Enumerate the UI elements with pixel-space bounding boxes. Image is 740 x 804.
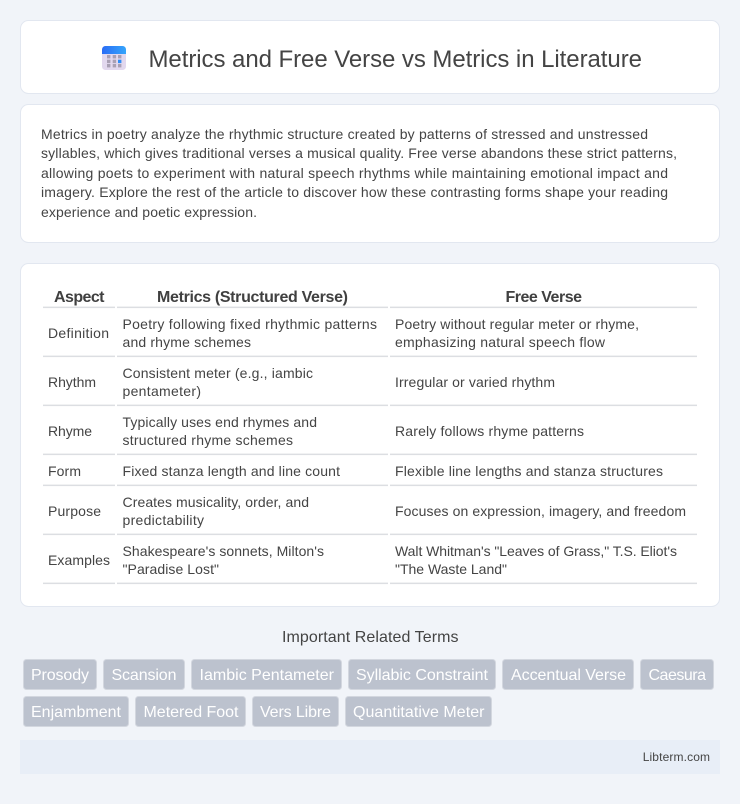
table row: Definition xyxy=(48,316,639,350)
panel: header xyxy=(20,20,720,94)
table row: Definition: and rhyme schemes xyxy=(122,334,251,350)
tag: Caesura: Caesura xyxy=(648,667,706,684)
table row: Rhythm: Consistent meter (e.g., iambic xyxy=(122,365,313,381)
table header row: Aspect xyxy=(54,289,105,306)
table row: Purpose: Focuses on expression, imagery, and freedom xyxy=(395,503,686,519)
table row: Form: Fixed stanza length and line count xyxy=(122,463,340,479)
text block: introduction paragraph: allowing poets to experiment with natural speech rhythms while maintaining emotional impact and xyxy=(41,165,668,181)
table row: Purpose: Purpose xyxy=(48,503,101,519)
table row: Rhyme: Rarely follows rhyme patterns xyxy=(395,423,584,439)
table row: Rhythm: pentameter) xyxy=(122,383,201,399)
table row: Examples: Walt Whitman's "Leaves of Grass," T.S. Eliot's xyxy=(395,543,677,559)
table header row: Free Verse xyxy=(506,289,582,306)
tag: Enjambment: Enjambment xyxy=(31,704,122,721)
footer xyxy=(20,740,720,774)
table row: Definition: Poetry without regular meter or rhyme, xyxy=(395,316,639,332)
table row: Examples: "The Waste Land" xyxy=(395,561,507,577)
table row: Rhythm: Irregular or varied rhythm xyxy=(395,374,555,390)
tag: Enjambment xyxy=(24,696,128,726)
table row: Purpose: Creates musicality, order, and xyxy=(122,494,309,510)
text block: introduction paragraph: syllables, which gives traditional verses a musical quality. Free verse abandons these strict patterns, xyxy=(41,145,677,161)
tag: Iambic Pentameter xyxy=(192,660,342,690)
text block: introduction paragraph: Metrics in poetry analyze the rhythmic structure created by patterns of stressed and unstressed xyxy=(41,126,648,142)
tag: Syllabic Constraint xyxy=(348,660,496,690)
tag: Syllabic Constraint: Syllabic Constraint xyxy=(356,667,489,684)
table row: Definition: Poetry following fixed rhythmic patterns xyxy=(122,316,377,332)
title: Metrics and Free Verse vs Metrics in Literature xyxy=(148,46,642,73)
tag: Accentual Verse: Accentual Verse xyxy=(511,667,626,684)
tag: Scansion xyxy=(104,660,184,690)
tag: Iambic Pentameter: Iambic Pentameter xyxy=(200,667,335,684)
table row: Form: Form xyxy=(48,463,81,479)
table row: Definition: emphasizing natural speech flow xyxy=(395,334,606,350)
table row: Rhyme xyxy=(48,414,584,448)
tag: Quantitative Meter xyxy=(346,696,492,726)
table row: Rhyme: Rhyme xyxy=(48,423,92,439)
panel: comparison table xyxy=(20,264,720,606)
heading: important related terms: Important Related Terms xyxy=(282,629,458,646)
panel: introduction xyxy=(20,104,720,242)
text block: introduction paragraph: imagery. Explore the rest of the article to discover how these contrasting forms shape your reading xyxy=(41,184,668,200)
tag: Scansion: Scansion xyxy=(112,667,176,684)
table row: Purpose xyxy=(48,494,686,528)
icon: calendar xyxy=(102,46,126,70)
tag: Quantitative Meter: Quantitative Meter xyxy=(353,704,485,721)
tag: Prosody xyxy=(24,660,96,690)
text block: introduction paragraph: experience and poetic expression. xyxy=(41,204,257,220)
table row: Examples xyxy=(48,543,677,577)
tag: Metered Foot: Metered Foot xyxy=(144,704,239,721)
table row: Rhythm: Rhythm xyxy=(48,374,96,390)
table row: Rhyme: Typically uses end rhymes and xyxy=(122,414,317,430)
tag: Caesura xyxy=(640,660,714,690)
table row: Form xyxy=(48,463,663,479)
tag: Prosody: Prosody xyxy=(31,667,89,684)
table row: Examples: "Paradise Lost" xyxy=(122,561,219,577)
tag: Vers Libre: Vers Libre xyxy=(260,704,331,721)
table header row xyxy=(54,289,582,306)
table row: Rhythm xyxy=(48,365,555,399)
table header row: Metrics (Structured Verse) xyxy=(157,289,348,306)
table row: Examples: Shakespeare's sonnets, Milton's xyxy=(122,543,324,559)
table row: Purpose: predictability xyxy=(122,512,204,528)
tag: Vers Libre xyxy=(252,696,338,726)
table row: Examples: Examples xyxy=(48,552,110,568)
tag: Metered Foot xyxy=(136,696,246,726)
table row: Form: Flexible line lengths and stanza structures xyxy=(395,463,663,479)
tag list: related terms xyxy=(24,660,714,726)
text block: introduction paragraph xyxy=(41,126,677,220)
table row: Definition: Definition xyxy=(48,325,109,341)
table row: Rhyme: structured rhyme schemes xyxy=(122,432,293,448)
tag: Accentual Verse xyxy=(502,660,634,690)
footer: Libterm.com xyxy=(643,750,710,764)
